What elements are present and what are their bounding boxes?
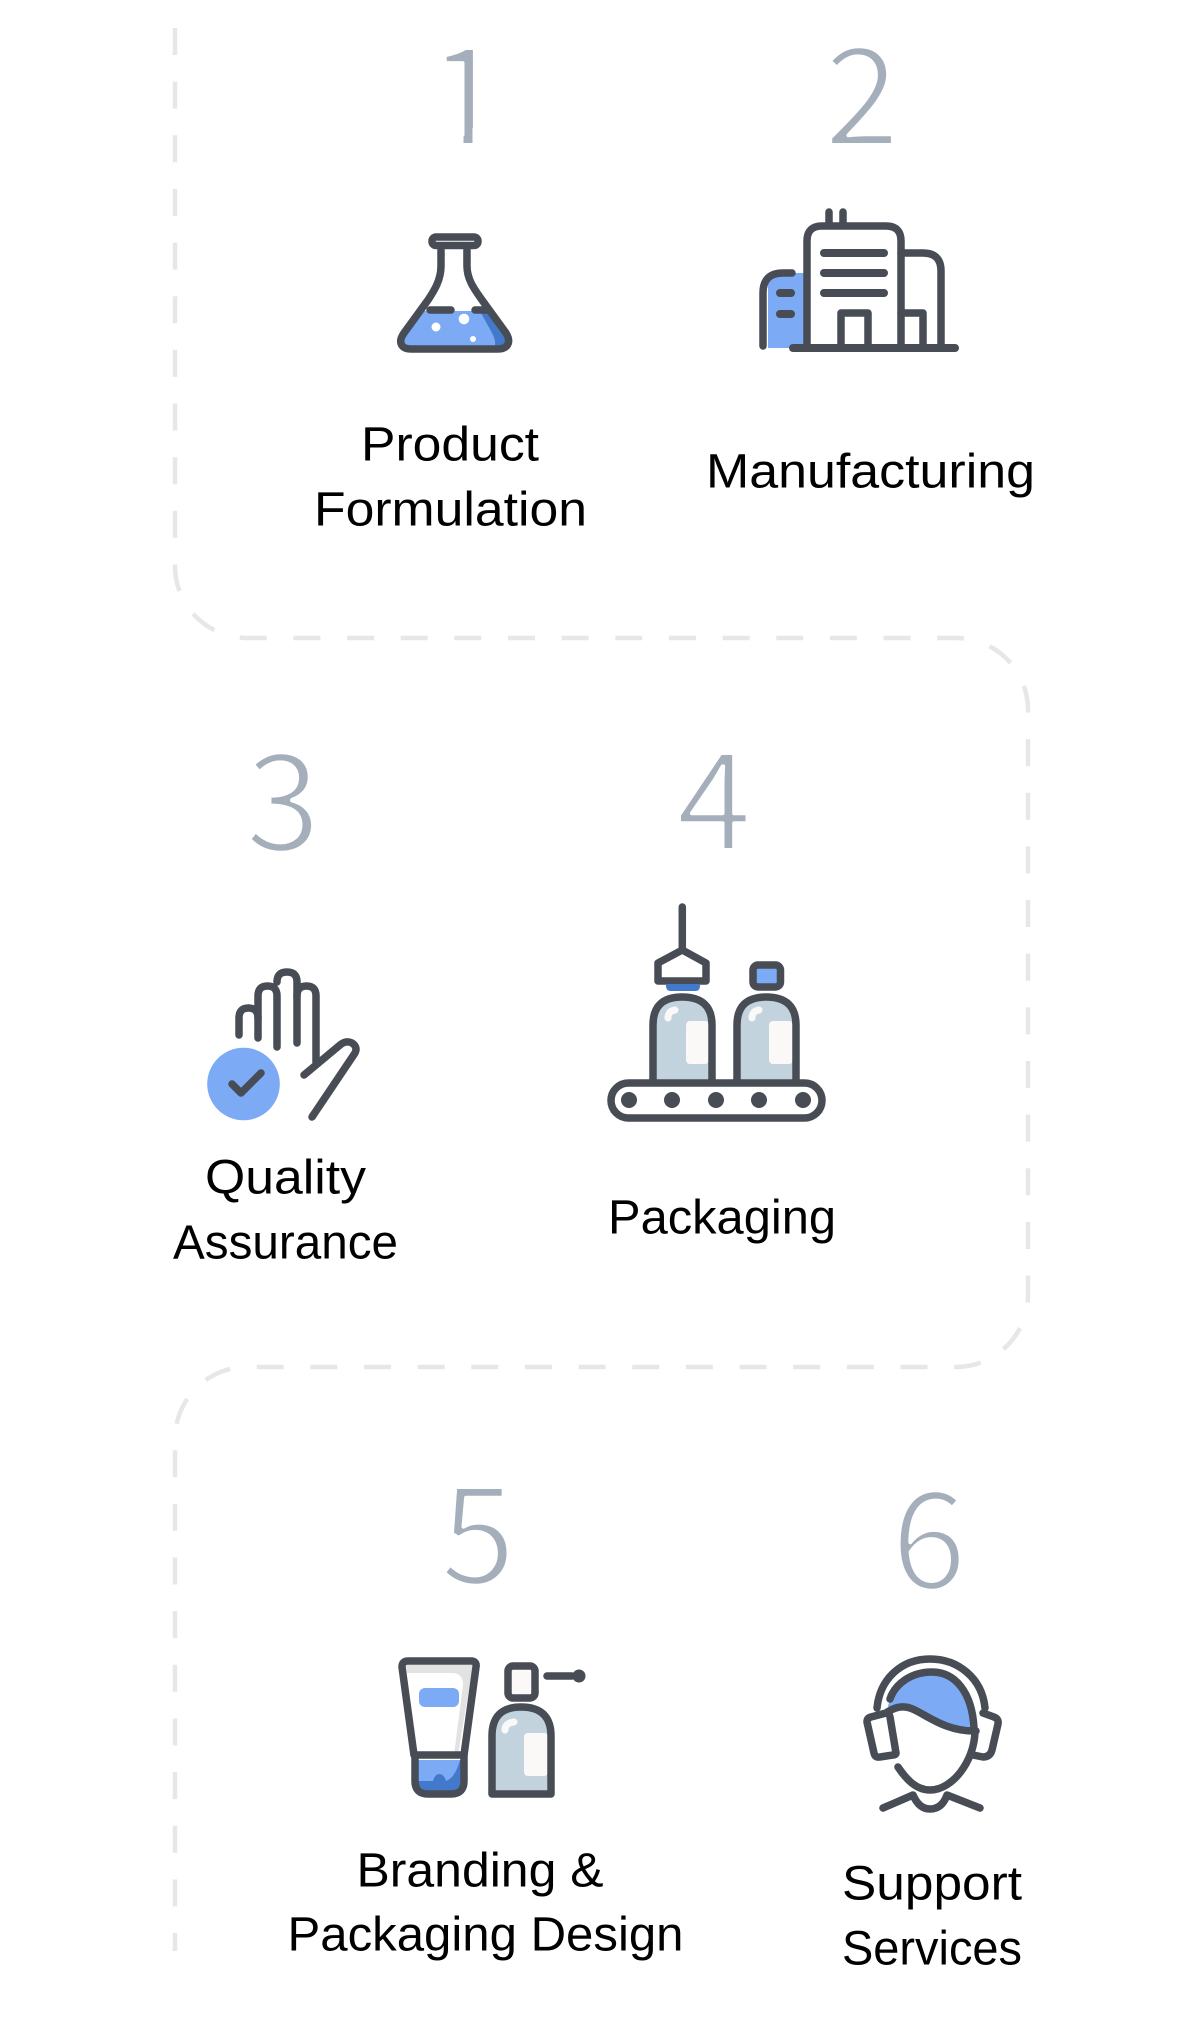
label: Support bbox=[842, 1858, 1022, 1910]
label: Services bbox=[842, 1922, 1022, 1976]
step 2: manufacturing bbox=[706, 0, 1035, 498]
icon: bottles on conveyor bbox=[611, 907, 822, 1118]
label: Packaging bbox=[608, 1192, 836, 1244]
step 4: packaging bbox=[608, 693, 836, 1244]
step 6: support services bbox=[842, 1432, 1022, 1976]
number 6: 6 bbox=[891, 1432, 967, 1629]
label: Quality bbox=[205, 1152, 366, 1204]
number 5: 5 bbox=[440, 1427, 516, 1624]
number 4: 4 bbox=[676, 693, 752, 890]
step 5: branding and packaging design bbox=[288, 1427, 684, 1962]
label: Assurance bbox=[173, 1216, 398, 1270]
label: Branding & bbox=[356, 1844, 604, 1898]
icon: factory buildings bbox=[763, 212, 955, 348]
label: Product bbox=[361, 418, 539, 472]
label: Manufacturing bbox=[706, 446, 1035, 498]
icon: tube and spray bottle bbox=[402, 1661, 586, 1794]
label: Formulation bbox=[314, 484, 587, 536]
icon: hand with check badge bbox=[207, 972, 356, 1120]
icon: headset agent bbox=[867, 1659, 998, 1809]
label: Packaging Design bbox=[288, 1908, 684, 1962]
infographic: six numbered steps bbox=[172, 28, 1032, 1965]
icon: flask bbox=[401, 237, 509, 349]
step 3: quality assurance bbox=[173, 694, 398, 1270]
step 1: product formulation bbox=[314, 0, 587, 536]
number 3: 3 bbox=[245, 694, 321, 891]
